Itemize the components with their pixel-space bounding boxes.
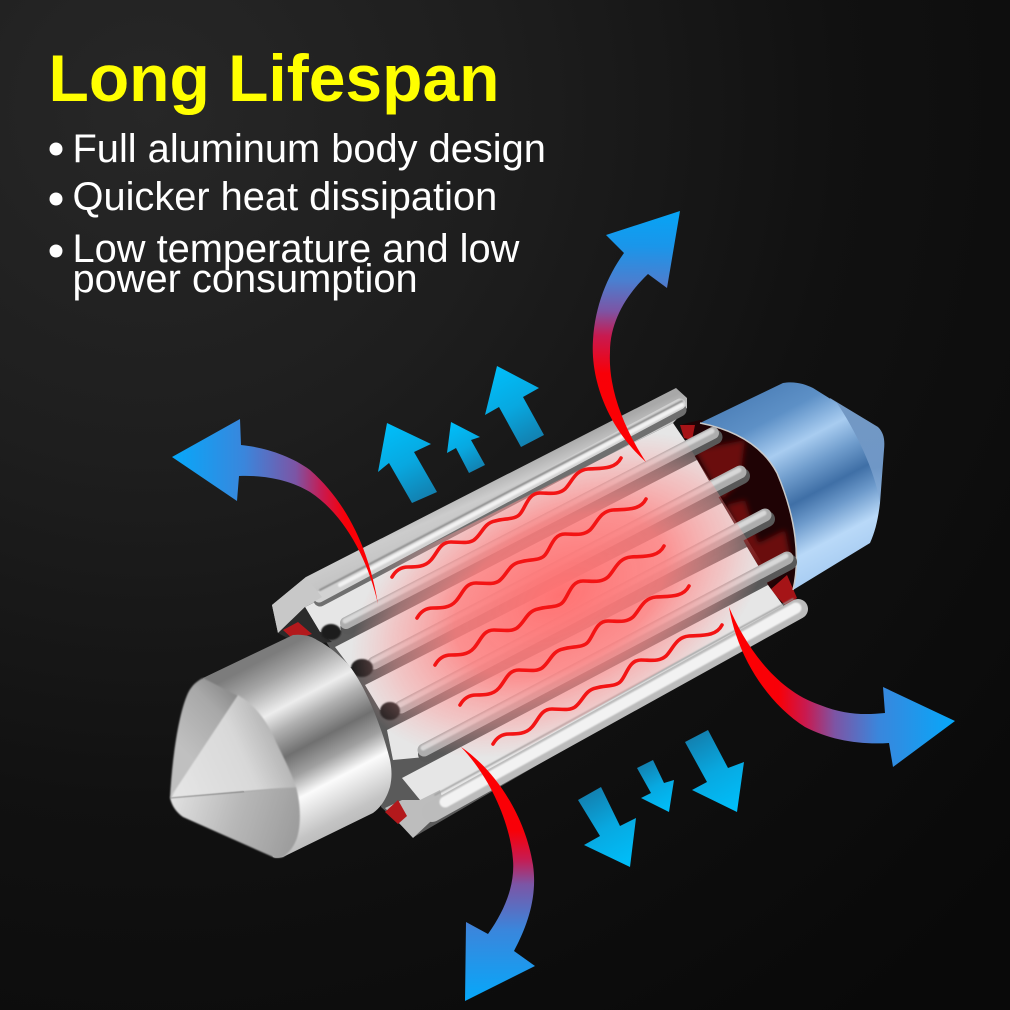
heatsink body bbox=[272, 366, 824, 838]
bullet: low temperature: power consumption bbox=[72, 257, 418, 301]
feature list bbox=[50, 127, 546, 301]
bottom rail block bbox=[385, 790, 445, 838]
bright red reflections bbox=[680, 425, 797, 606]
up arrow 1 bbox=[378, 423, 437, 503]
title: Long Lifespan bbox=[48, 41, 499, 115]
top rail bbox=[272, 388, 687, 633]
cone lower facet bbox=[170, 787, 300, 858]
arrow: left curved heat bbox=[172, 419, 378, 604]
fin rod 1 bbox=[345, 431, 715, 627]
plate 3 bbox=[365, 503, 738, 714]
bottom rail bbox=[432, 599, 798, 812]
cone shoulder bbox=[170, 678, 242, 798]
plate 4 bbox=[387, 547, 762, 760]
small arrows: upward bbox=[378, 366, 544, 503]
bulb illustration bbox=[170, 366, 884, 858]
arrow: bottom curved heat bbox=[461, 747, 535, 1001]
bullet: low temperature: Low temperature and low bbox=[72, 227, 520, 271]
plate 2 bbox=[335, 460, 712, 670]
plate 5 bbox=[402, 585, 785, 800]
down arrow 1 bbox=[685, 730, 744, 812]
cone upper facet bbox=[170, 695, 296, 798]
arrow: top curved heat bbox=[593, 211, 680, 462]
heat glow bbox=[355, 441, 760, 751]
heat waves bbox=[392, 458, 722, 744]
arrow: right curved heat bbox=[729, 607, 955, 767]
small arrows: downward bbox=[578, 730, 744, 867]
cap cylinder bbox=[203, 635, 392, 858]
front cap: silver bbox=[170, 635, 392, 858]
body underlay bbox=[306, 423, 800, 837]
fin rod 2 bbox=[373, 470, 742, 667]
interior red reflections bbox=[695, 440, 790, 585]
plate 1 bbox=[305, 423, 690, 632]
rear cap: blue cone bbox=[830, 398, 884, 520]
fin rod 3 bbox=[400, 513, 767, 711]
left end block bbox=[272, 577, 322, 633]
up arrow 2 bbox=[447, 422, 485, 473]
down arrow 3 bbox=[578, 787, 636, 867]
bullet: heat dissipation: Quicker heat dissipation bbox=[72, 175, 497, 219]
bullet: low temperature bbox=[50, 227, 520, 301]
fin root shadows bbox=[321, 624, 400, 720]
top rail bar bbox=[319, 401, 682, 600]
up arrow 3 bbox=[485, 366, 544, 447]
red solder spots bbox=[283, 622, 407, 824]
down arrow 2 bbox=[637, 760, 674, 812]
bullet: aluminum body: Full aluminum body design bbox=[72, 127, 546, 171]
rear cap rim bbox=[700, 423, 796, 590]
rear cap interior bbox=[680, 420, 796, 612]
rear cap: blue cylinder bbox=[700, 382, 880, 590]
fin rods bbox=[345, 431, 789, 754]
fin rod 4 bbox=[423, 556, 789, 754]
left end shadow bbox=[278, 607, 332, 645]
